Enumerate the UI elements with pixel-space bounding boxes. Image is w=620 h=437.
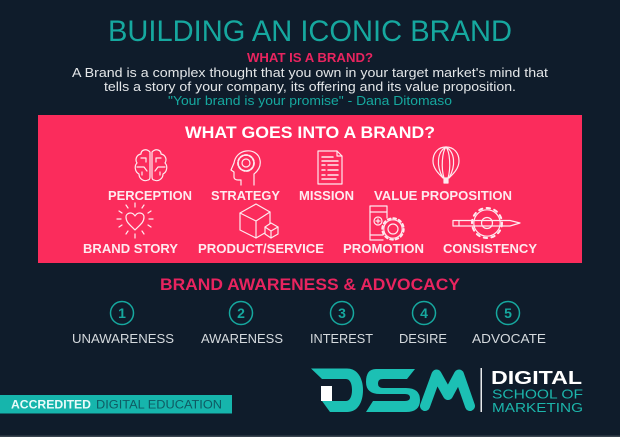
step 2: awareness: AWARENESS	[201, 331, 283, 346]
logo wordmark	[491, 368, 583, 415]
step 1: unawareness: UNAWARENESS	[72, 331, 174, 346]
panel: what goes into a brand	[38, 115, 582, 263]
step 4: desire: DESIRE	[399, 331, 447, 346]
step 4: desire: 4	[420, 305, 428, 321]
icon: phone and gear	[370, 206, 404, 240]
label: consistency: CONSISTENCY	[443, 241, 537, 256]
step 2: awareness: 2	[237, 305, 245, 321]
panel heading: WHAT GOES INTO A BRAND?	[185, 123, 435, 142]
step 3: interest: INTEREST	[310, 331, 373, 346]
icon: brain	[135, 150, 167, 181]
label: value proposition: VALUE PROPOSITION	[374, 188, 512, 203]
step 4: desire	[399, 302, 447, 346]
icon: head with gear	[231, 151, 260, 185]
step 5: advocate: 5	[504, 305, 512, 321]
step 1: unawareness	[72, 302, 174, 346]
definition line 2: tells a story of your company, its offering and its value proposition.	[104, 79, 516, 94]
step 5: advocate: ADVOCATE	[472, 331, 546, 346]
step 3: interest: 3	[338, 305, 346, 321]
accreditation banner	[0, 395, 232, 414]
quote: "Your brand is your promise" - Dana Ditomaso	[168, 93, 452, 108]
icon: document	[318, 151, 342, 184]
definition line 1: A Brand is a complex thought that you own in your target market's mind that	[72, 65, 548, 80]
icon: boxes	[240, 204, 278, 238]
step 1: unawareness: 1	[118, 305, 126, 321]
step 5: advocate	[472, 302, 546, 346]
subheading: what is a brand: WHAT IS A BRAND?	[247, 51, 373, 65]
step 2: awareness	[201, 302, 283, 346]
label: strategy: STRATEGY	[211, 188, 280, 203]
label: promotion: PROMOTION	[343, 241, 424, 256]
logo wordmark: DIGITAL	[491, 368, 582, 388]
label: perception: PERCEPTION	[108, 188, 192, 203]
label: mission: MISSION	[299, 188, 354, 203]
logo wordmark: SCHOOL OF	[492, 388, 583, 402]
logo: Digital School of Marketing	[311, 368, 583, 415]
intro text block	[72, 51, 548, 108]
icon: heart with rays	[117, 203, 153, 238]
accreditation banner: DIGITAL EDUCATION	[96, 398, 222, 412]
icon: hot-air balloon	[433, 147, 459, 183]
icon: pencil and gear	[453, 208, 520, 238]
label: product/service: PRODUCT/SERVICE	[198, 241, 324, 256]
title: BUILDING AN ICONIC BRAND	[108, 15, 512, 48]
label: brand story: BRAND STORY	[83, 241, 178, 256]
section heading: brand awareness and advocacy: BRAND AWARENESS & ADVOCACY	[160, 275, 461, 294]
logo mark: DSM	[311, 368, 470, 412]
logo wordmark: MARKETING	[492, 401, 583, 415]
step 3: interest	[310, 302, 373, 346]
accreditation banner: ACCREDITED	[11, 398, 91, 412]
